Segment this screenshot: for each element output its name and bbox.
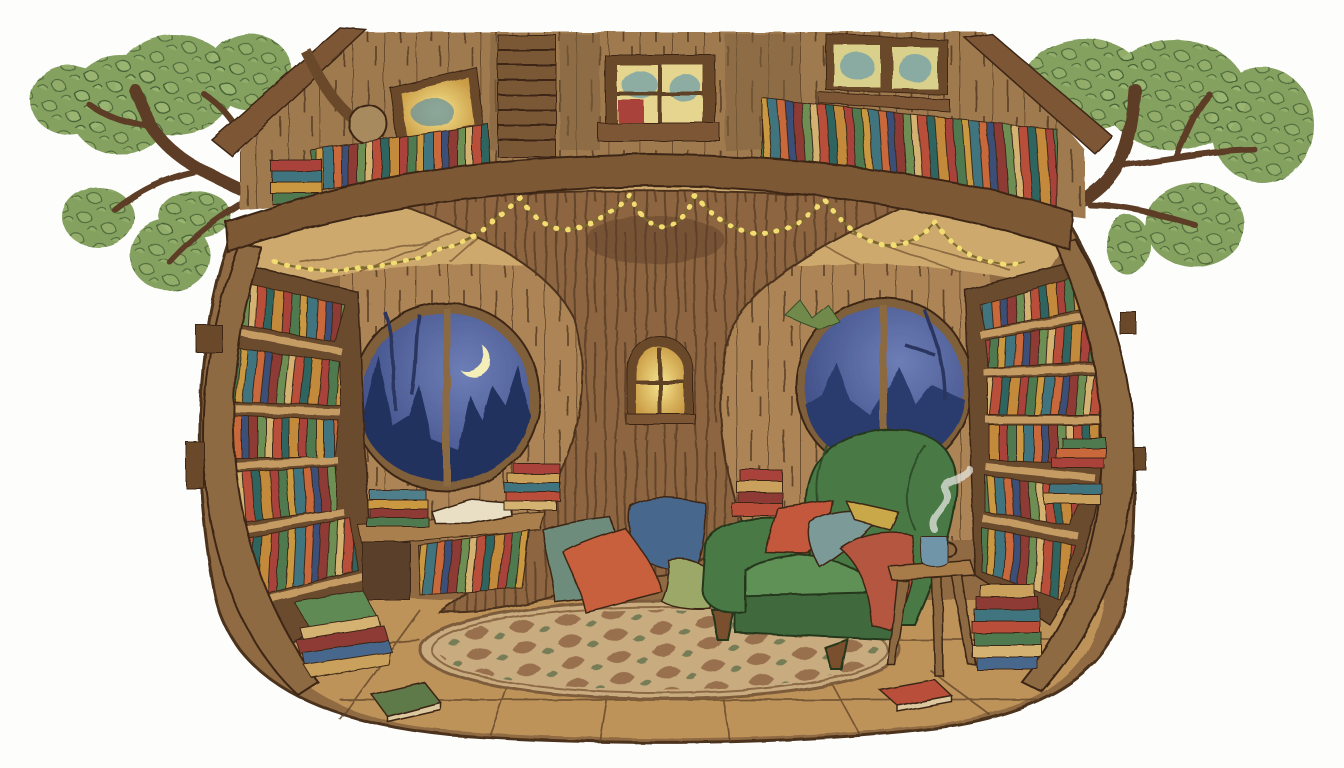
loose book right — [880, 680, 952, 712]
throw blanket — [840, 532, 914, 630]
attic picture — [390, 67, 484, 148]
right round window — [796, 298, 972, 474]
book stack on right shelf — [1044, 438, 1106, 504]
left bookcase outer frame — [203, 244, 318, 695]
left tree foliage and branches — [30, 34, 292, 291]
armchair — [702, 430, 956, 670]
left round window — [352, 303, 540, 491]
right bookcase outer frame — [1022, 240, 1134, 692]
roof beam left — [212, 28, 366, 156]
attic shutter ladder — [498, 35, 556, 157]
floor — [240, 590, 1105, 742]
trunk arched window — [626, 336, 695, 424]
fairy lights — [275, 195, 1025, 270]
book stack behind chair — [732, 470, 782, 516]
attic branch left — [305, 50, 355, 120]
desk with books — [358, 512, 545, 600]
attic window centre — [598, 55, 720, 141]
book stack right floor — [972, 585, 1042, 669]
attic lantern disc — [349, 105, 387, 143]
back wall — [340, 262, 990, 540]
side table — [888, 560, 975, 676]
cushions — [543, 497, 712, 612]
chair cushions — [765, 500, 898, 567]
rug — [420, 601, 900, 699]
frame brackets — [186, 312, 1146, 488]
attic wall — [240, 32, 1085, 218]
book stack on desk right — [504, 464, 560, 510]
left bookcase — [230, 265, 372, 645]
mug with steam — [921, 470, 970, 566]
loose book left — [372, 683, 441, 722]
main room shell — [200, 181, 1135, 742]
attic window right — [818, 34, 950, 112]
open book on desk — [432, 500, 512, 524]
attic book stack left — [270, 160, 322, 204]
left shelves books — [230, 283, 358, 595]
main curved beam — [226, 154, 1072, 252]
attic books left — [310, 124, 490, 190]
attic books right — [762, 98, 1058, 206]
roof beam right — [965, 34, 1112, 154]
tree trunk — [400, 191, 905, 612]
ceiling — [228, 187, 1072, 292]
right shelf planks — [980, 316, 1104, 536]
left shelf planks — [232, 332, 362, 602]
right bookcase — [965, 262, 1104, 625]
right shelves books — [980, 275, 1104, 600]
book stack left floor — [294, 590, 392, 678]
book stack by left window — [367, 490, 429, 527]
ivy sprig — [785, 300, 840, 330]
right tree foliage and branches — [1023, 39, 1314, 275]
